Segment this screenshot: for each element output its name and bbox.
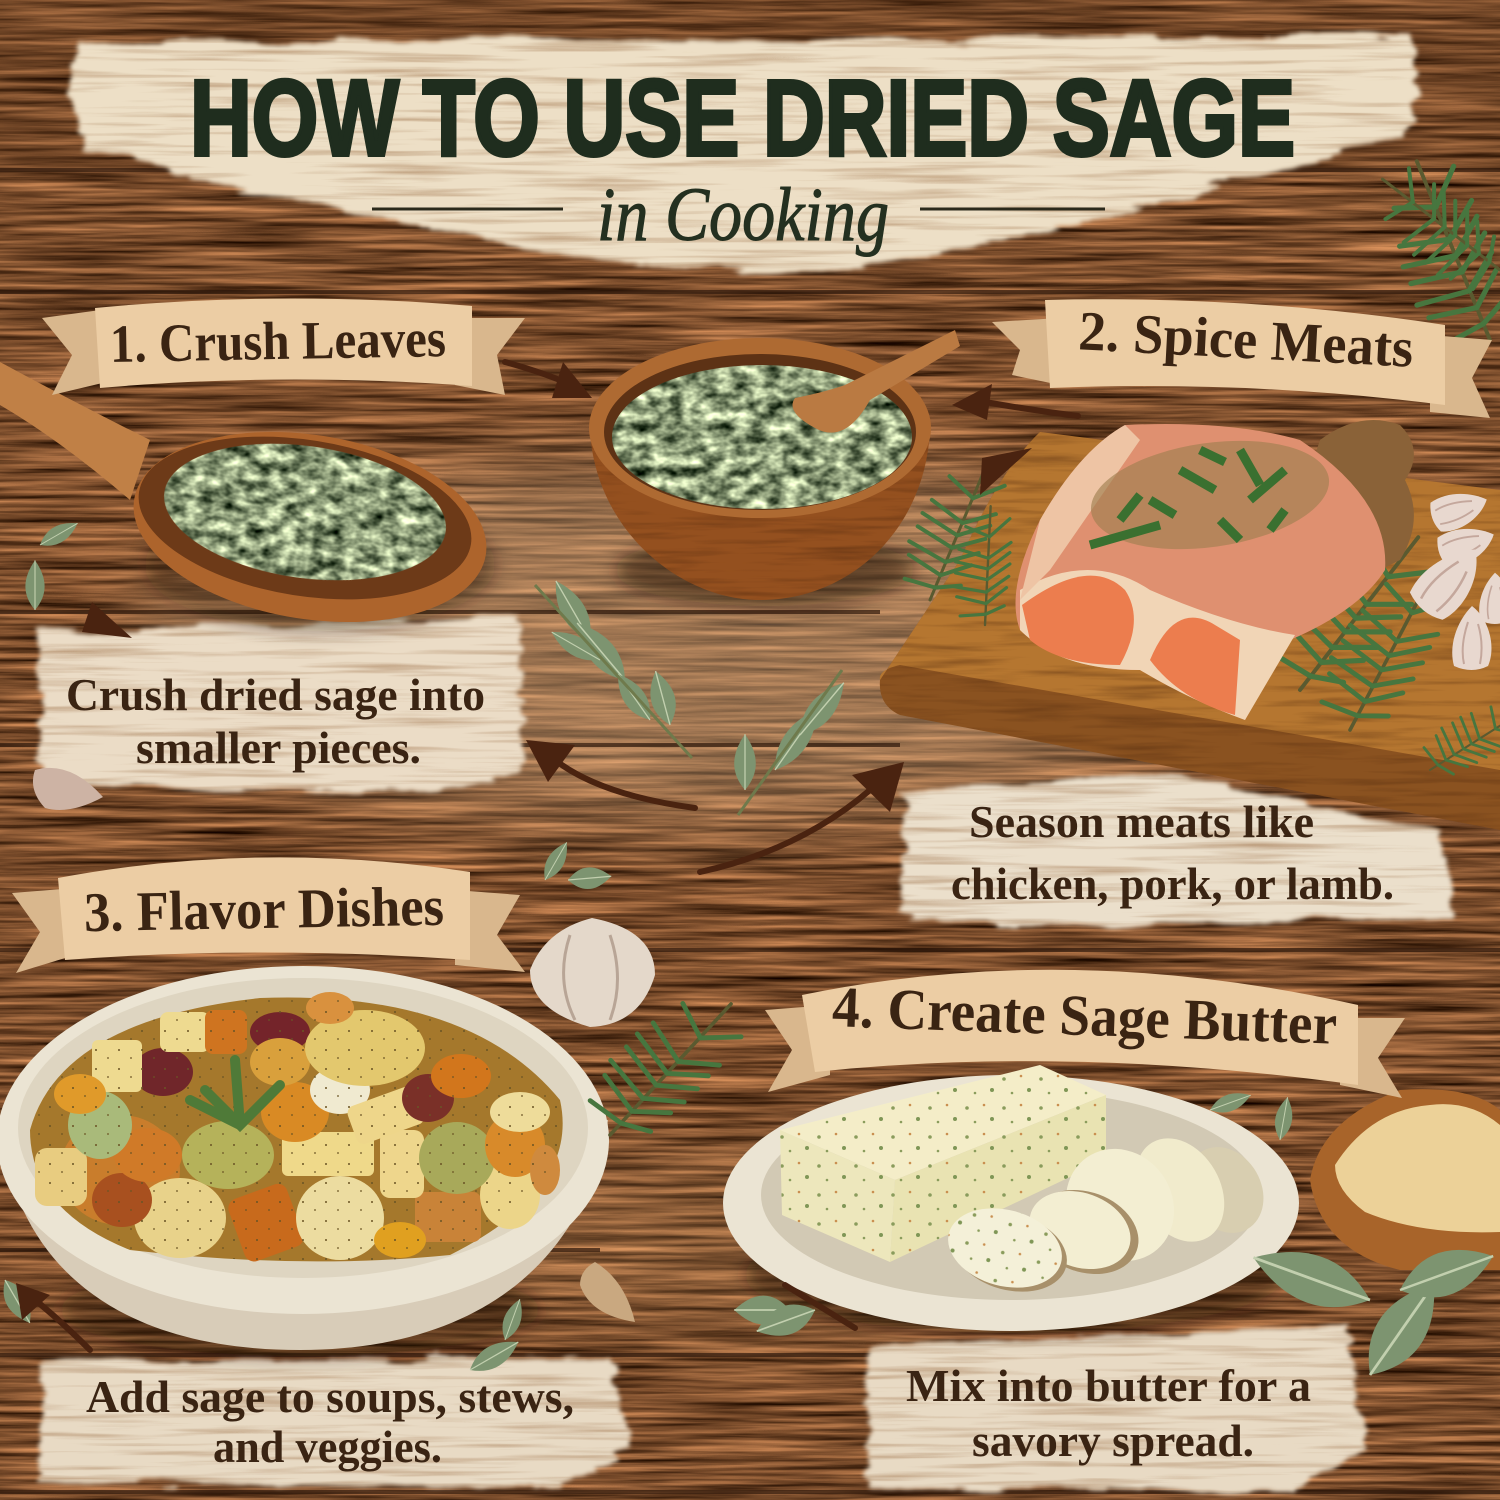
garlic bulb: [530, 918, 655, 1027]
banner: step 3: [12, 857, 525, 973]
rosemary beside bowl: [582, 999, 749, 1136]
sage sprigs small: [0, 516, 1500, 1389]
arrow to board: [980, 448, 1032, 495]
herb topping: [1084, 427, 1336, 563]
step 3 text: and veggies.: [213, 1421, 442, 1472]
subtitle: in Cooking: [597, 173, 889, 257]
arrow to step 2 center: [700, 762, 904, 872]
butter slices: [939, 1122, 1279, 1304]
step 1 text: Crush dried sage into: [66, 669, 485, 720]
arrow to step 1 text: [82, 602, 132, 638]
arrows: [16, 362, 1078, 1350]
arrow bottom center: [785, 1285, 855, 1328]
food base: [30, 997, 563, 1261]
rosemary sprigs on board: [873, 457, 1500, 784]
step 1 text: smaller pieces.: [136, 722, 421, 773]
step 3 text: Add sage to soups, stews,: [86, 1371, 574, 1422]
step 4 text: Mix into butter for a: [906, 1360, 1311, 1411]
dried leaves in spoon: [155, 427, 455, 597]
illustration: wooden bowl with sage: [589, 330, 960, 606]
mushroom end: [1300, 420, 1414, 580]
step 3 text: [86, 1371, 574, 1472]
butter block: [780, 1065, 1106, 1262]
cutting board: [880, 432, 1500, 830]
banner: step 2: [992, 299, 1492, 418]
step 1 text: [66, 669, 485, 773]
herb garnish: [190, 1060, 280, 1125]
garlic cloves: [1405, 483, 1500, 670]
illustration: bread: [1310, 1089, 1500, 1270]
meat cut faces: [1022, 576, 1240, 715]
step 2 heading: 2. Spice Meats: [1077, 300, 1415, 380]
title paint swash: [72, 36, 1417, 274]
illustration: sage butter plate: [723, 1065, 1299, 1333]
panel: step 1 description: [38, 615, 522, 790]
banner: step 1: [42, 298, 525, 395]
arrow to step 1 center: [526, 740, 695, 808]
step 2 text: Season meats like: [969, 796, 1314, 847]
garlic clove left: [33, 768, 103, 810]
illustration: stuffing bowl: [0, 966, 609, 1356]
rosemary top right: [1357, 152, 1500, 357]
panel: step 3 description: [40, 1358, 632, 1488]
step 4 heading: 4. Create Sage Butter: [831, 974, 1338, 1057]
vegetables: [30, 992, 563, 1264]
step 2 text: chicken, pork, or lamb.: [951, 858, 1394, 909]
sage sprigs center: [535, 575, 853, 815]
meat fat band: [1020, 570, 1295, 720]
step 2 text: [951, 796, 1394, 909]
small scoop: [792, 330, 960, 433]
garlic clove bottom: [580, 1262, 635, 1322]
banner: step 4: [765, 970, 1405, 1098]
step 3 heading: 3. Flavor Dishes: [83, 876, 445, 944]
dried leaves in bowl: [612, 365, 912, 509]
step 1 heading: 1. Crush Leaves: [109, 308, 446, 374]
illustration: meat on cutting board: [873, 420, 1500, 830]
arrow from meats: [952, 384, 1078, 420]
arrow to bowl: [505, 362, 592, 398]
arrow bottom left: [16, 1283, 90, 1350]
illustration: wooden spoon with sage: [0, 362, 500, 646]
panel: step 2 description: [900, 775, 1452, 928]
step 4 text: savory spread.: [972, 1415, 1254, 1466]
step 4 text: [906, 1360, 1311, 1466]
panel: step 4 description: [868, 1325, 1365, 1490]
meat roast: [1016, 424, 1385, 720]
